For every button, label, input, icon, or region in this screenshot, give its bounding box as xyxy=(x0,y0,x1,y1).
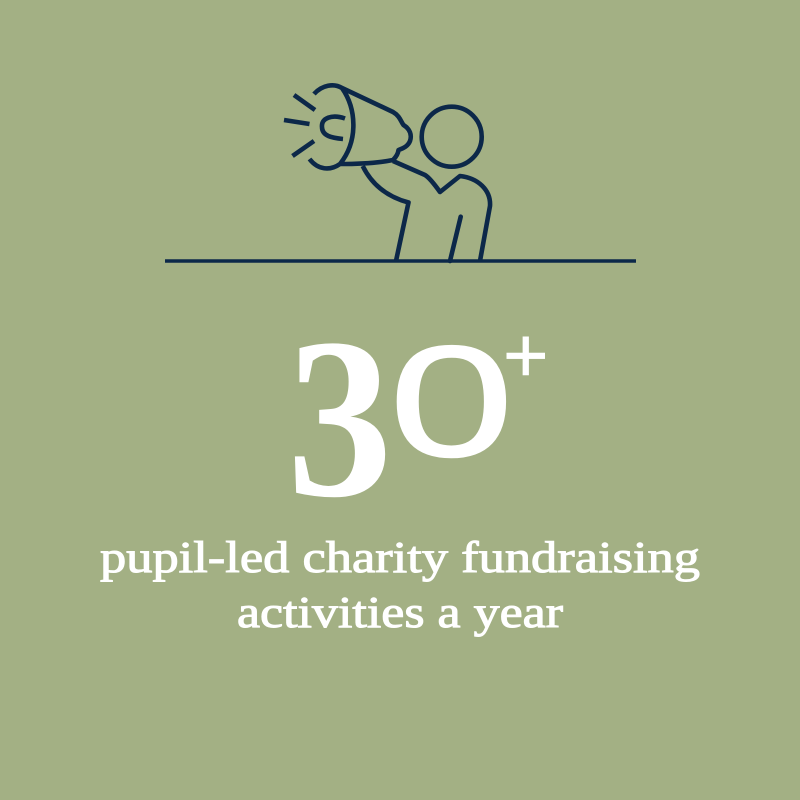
digit zero: 0 xyxy=(389,314,514,490)
sound waves xyxy=(284,95,315,156)
ground line xyxy=(165,259,636,263)
person head xyxy=(422,107,482,167)
caption xyxy=(100,533,700,637)
icon: person with megaphone xyxy=(165,85,636,261)
digit three: 3 xyxy=(287,291,392,545)
person lower arm xyxy=(363,166,408,261)
caption line 2: activities a year xyxy=(237,588,563,637)
caption line 1: pupil-led charity fundraising xyxy=(100,533,700,582)
megaphone xyxy=(310,85,411,168)
person body and arm xyxy=(393,161,490,261)
plus sign: + xyxy=(503,311,549,399)
inner arm line xyxy=(450,217,461,261)
megaphone sound curve xyxy=(322,117,345,139)
big number 30+ xyxy=(287,291,549,545)
